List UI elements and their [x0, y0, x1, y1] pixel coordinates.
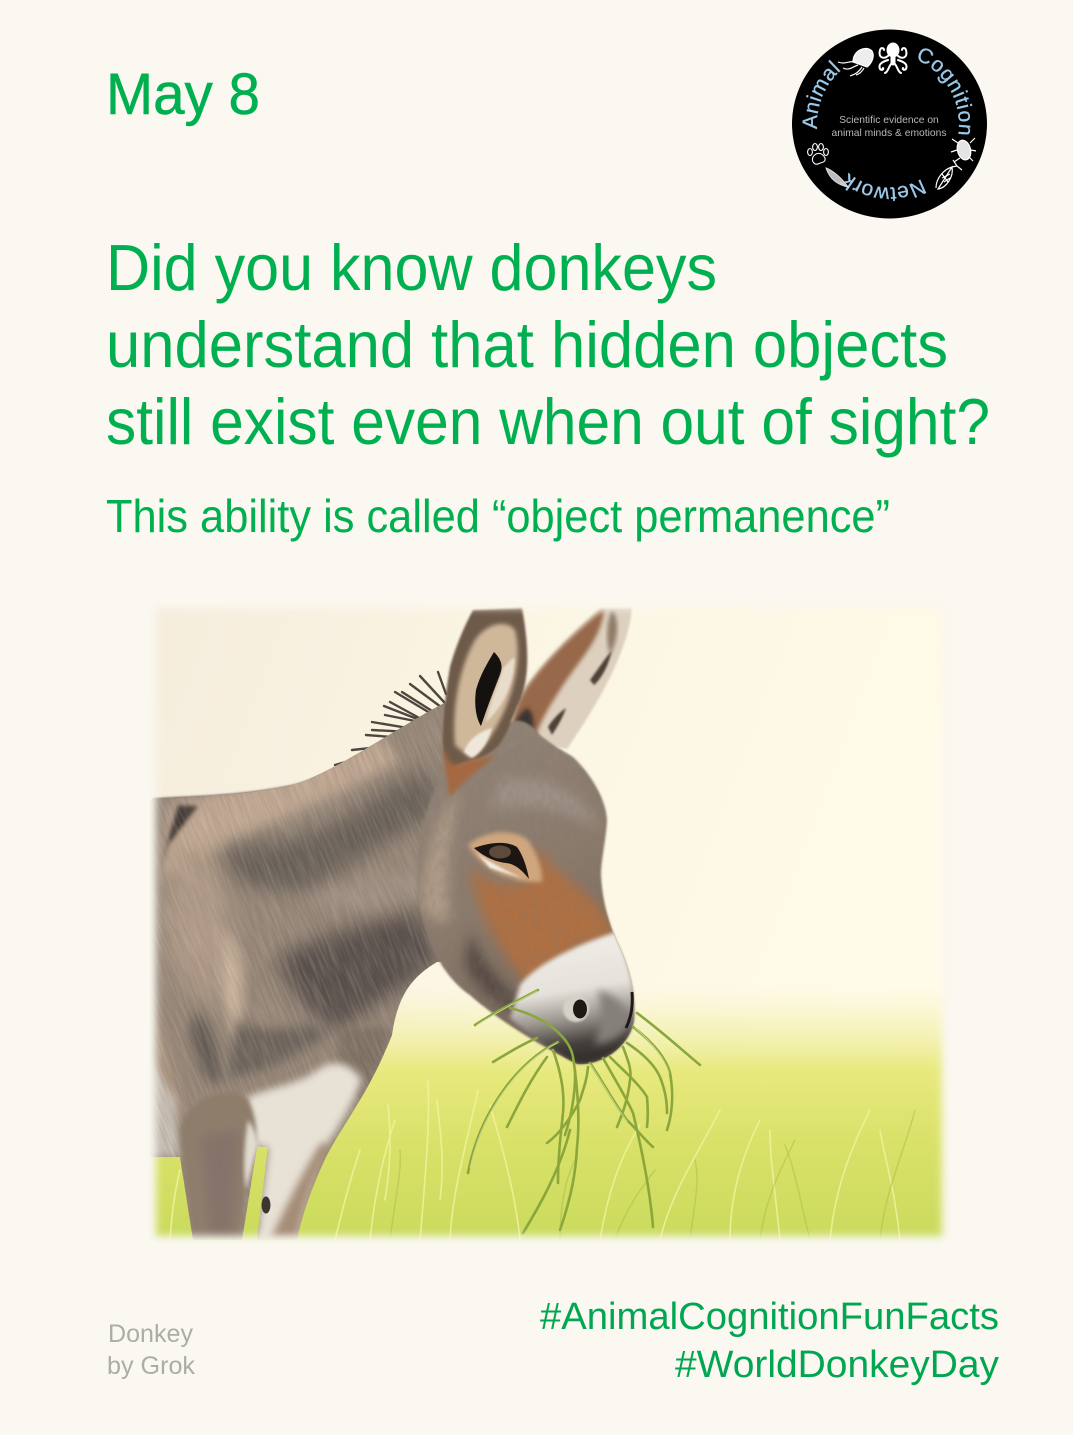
icon: fish [936, 160, 962, 189]
background grass blades [170, 1080, 915, 1240]
icon: paw [808, 144, 828, 164]
scene background [140, 595, 960, 1250]
icon: jellyfish [838, 48, 873, 76]
main question heading: still exist even when out of sight? [106, 385, 990, 458]
icon: feather [826, 168, 849, 188]
main question heading [106, 231, 990, 458]
logo curved name: Cognition [918, 48, 972, 134]
image credit [107, 1320, 195, 1380]
logo curved name [802, 48, 972, 202]
body shading [150, 735, 440, 1157]
logo tagline: animal minds & emotions [831, 128, 947, 139]
ear: far right ear [510, 608, 632, 749]
illustration: donkey eating grass [150, 606, 948, 1242]
chest and leg white patch [246, 1064, 362, 1240]
grass strands in mouth [468, 990, 700, 1233]
logo: Animal Cognition Network badge [792, 30, 987, 218]
image credit: Donkey [108, 1320, 194, 1348]
main question heading: understand that hidden objects [106, 308, 948, 381]
back hair line [152, 779, 308, 800]
front legs [180, 1093, 270, 1240]
eye [468, 832, 542, 882]
head [415, 715, 635, 1064]
icon: beetle [951, 138, 976, 162]
orange ear-base patch [444, 745, 496, 798]
image credit: by Grok [107, 1352, 195, 1380]
logo tagline: Scientific evidence on [839, 115, 939, 126]
nostril [563, 992, 632, 1028]
date heading: May 8 [106, 62, 260, 127]
hashtags [540, 1296, 999, 1386]
logo curved name: Network [844, 172, 926, 202]
head shading [420, 777, 614, 1011]
orange face patch [470, 845, 614, 990]
fur texture on body [158, 708, 442, 1216]
fur texture on head [423, 750, 606, 1005]
body and neck [150, 702, 448, 1240]
mane [334, 670, 448, 766]
subheading: This ability is called “object permanence” [106, 490, 890, 542]
icon: octopus [879, 42, 907, 73]
hashtags: #WorldDonkeyDay [675, 1344, 999, 1386]
hashtags: #AnimalCognitionFunFacts [540, 1296, 999, 1338]
logo curved name: Animal [802, 60, 840, 130]
ear: near left ear [443, 608, 527, 770]
main question heading: Did you know donkeys [106, 231, 717, 304]
logo tagline [831, 115, 947, 139]
muzzle [510, 932, 635, 1064]
